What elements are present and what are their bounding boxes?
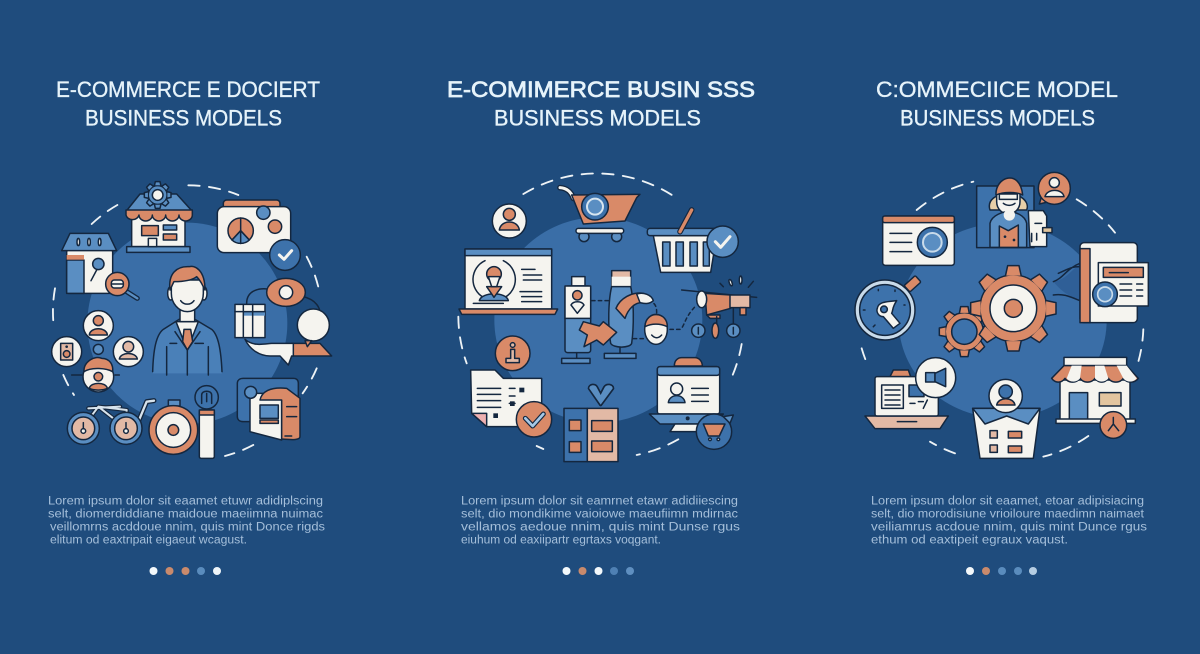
pagination dots: left panel <box>150 567 221 575</box>
body text: left panel: veillomrns acddoue nnim, quis mint Donce rigds <box>50 522 325 534</box>
icon: basket with profile badge <box>973 379 1040 458</box>
title: centre panel: E-COMIMERCE BUSIN SSS <box>447 77 755 102</box>
title: right panel: BUSINESS MODELS <box>900 106 1095 130</box>
icon: desktop monitor with cart badge <box>649 358 733 449</box>
body text: right panel <box>871 496 1147 546</box>
icon: web window with ring <box>883 216 954 265</box>
body text: centre panel: eiuhum od eaxiipartr egrtaxs voqgant. <box>461 534 661 546</box>
dashed ring <box>862 182 1143 457</box>
icon: support person with badge <box>977 172 1070 248</box>
body text: centre panel: selt, dio mondikime vaioiowe maeufiimn mdirnac <box>461 508 738 520</box>
panel: centre <box>447 77 757 575</box>
icon: info badge <box>495 336 530 371</box>
title: right panel: C:OMMECIICE MODEL <box>876 77 1118 102</box>
icon: gears <box>939 266 1056 357</box>
icon: bicycle <box>67 401 154 444</box>
icon: checklist box <box>564 385 618 462</box>
body text: centre panel <box>461 496 740 546</box>
body text: left panel <box>48 496 325 546</box>
blob background <box>494 217 702 423</box>
title: left panel <box>56 77 320 130</box>
panel: right <box>855 77 1148 575</box>
blob background <box>87 223 287 424</box>
dashed ring <box>53 185 319 456</box>
body text: left panel: elitum od eaxtripait eigaeut wcagust. <box>50 534 247 546</box>
icon: pie chart card <box>217 200 300 270</box>
icon: businessman <box>153 266 222 375</box>
icon: gauge dial <box>855 276 921 340</box>
icon: user badge <box>492 204 526 238</box>
body text: centre panel: Lorem ipsum dolor sit eamrnet etawr adidiiescing <box>461 496 738 508</box>
panel: left <box>48 77 332 575</box>
title: left panel: E-COMMERCE E DOCIERT <box>56 77 320 102</box>
body text: right panel: selt, dio morodisiune vrioiloure maedimn naimaet <box>871 508 1145 520</box>
icon: shop with magnifier <box>62 233 137 298</box>
pagination dots: right panel <box>966 567 1037 575</box>
body text: right panel: veiliamrus acdoue nnim, quis mint Dunce rgus <box>871 522 1147 534</box>
title: left panel: BUSINESS MODELS <box>85 106 282 130</box>
icon: megaphone with coins <box>670 276 757 338</box>
icon: shopping cart <box>560 188 640 242</box>
body text: left panel: selt, diomerdiddiane maidoue maeiimna nuimac <box>48 508 323 520</box>
icon: central flow diagram <box>562 271 667 363</box>
icon: target stopwatch and bottle <box>149 386 218 458</box>
blob background <box>899 223 1107 418</box>
icon: folder with screen <box>237 378 300 440</box>
dashed ring <box>458 173 742 455</box>
icon: laptop with megaphone bubble <box>865 358 956 429</box>
title: centre panel <box>447 77 755 130</box>
body text: centre panel: vellamos aedoue nnim, quis mint Dunse rgus <box>461 522 740 534</box>
body text: right panel: Lorem ipsum dolor sit eaamet, etoar adipisiacing <box>871 496 1144 508</box>
icon: storefront with gear <box>126 182 192 252</box>
icon: folder report with hand <box>1053 243 1148 323</box>
illustration: right panel <box>855 172 1148 458</box>
icon: network of people <box>52 311 143 392</box>
icon: basket with check <box>647 210 738 272</box>
illustration: left panel <box>52 182 332 458</box>
body text: right panel: ethum od eaxtipeit egraux vaqust. <box>871 534 1068 546</box>
icon: storefront with badge <box>1052 357 1138 438</box>
icon: document with check <box>471 370 552 437</box>
title: centre panel: BUSINESS MODELS <box>494 106 701 130</box>
icon: hand offering box with speech bubble <box>235 278 332 365</box>
pagination dots: centre panel <box>562 567 634 575</box>
body text: left panel: Lorem ipsum dolor sit eaamet etuwr adidiplscing <box>48 496 323 508</box>
title: right panel <box>876 77 1118 130</box>
icon: laptop profile <box>459 249 558 314</box>
illustration: centre panel <box>458 173 757 462</box>
